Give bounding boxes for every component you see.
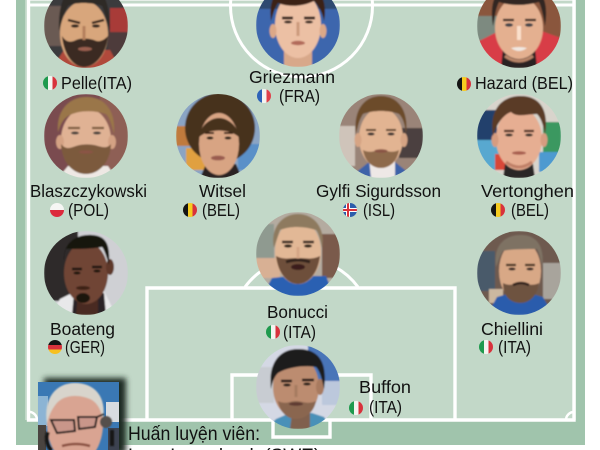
flag: Iceland — [343, 203, 357, 217]
player: Chiellini — [477, 231, 561, 357]
photo: Gylfi Sigurdsson — [339, 94, 423, 178]
photo: Witsel — [176, 93, 260, 178]
country: GER: (GER) — [65, 337, 105, 357]
player: Griezmann — [249, 0, 340, 106]
photo: Griezmann — [256, 0, 340, 67]
name: Witsel: Witsel — [199, 181, 246, 201]
country: FRA: (FRA) — [279, 86, 320, 106]
player: Blaszczykowski — [30, 94, 147, 220]
photo: Bonucci — [256, 212, 340, 296]
country: ITA: (ITA) — [498, 337, 531, 357]
flag: France — [257, 89, 272, 103]
country: ITA: (ITA) — [283, 322, 316, 342]
flag: Italy — [349, 401, 364, 415]
player: Hazard — [457, 0, 573, 93]
photo: Boateng — [44, 231, 128, 315]
photo: Blaszczykowski — [44, 94, 128, 178]
player: Bonucci — [256, 212, 340, 342]
country: ISL: (ISL) — [363, 200, 395, 220]
heading: Huấn luyện viên: Huấn luyện viên: — [128, 424, 260, 445]
flag: Poland — [50, 203, 64, 217]
photo: Buffon — [256, 345, 340, 429]
photo: Hazard — [477, 0, 561, 68]
player: Pelle — [43, 0, 132, 93]
name: Boateng: Boateng — [50, 319, 115, 339]
photo: Vertonghen — [477, 94, 561, 178]
coach label — [128, 424, 320, 450]
country: BEL: (BEL) — [511, 200, 549, 220]
country: BEL: (BEL) — [202, 200, 240, 220]
name: Pelle: Pelle(ITA) — [61, 73, 132, 93]
name: Hazard: Hazard (BEL) — [475, 73, 573, 93]
photo: Pelle — [44, 0, 128, 68]
name: Vertonghen: Vertonghen — [481, 181, 574, 201]
name: Blaszczykowski: Blaszczykowski — [30, 181, 147, 201]
country: ITA: (ITA) — [369, 397, 402, 417]
name: Buffon: Buffon — [359, 377, 411, 397]
name: Griezmann: Griezmann — [249, 67, 335, 87]
flag: Italy — [266, 325, 280, 339]
flag: Italy — [479, 340, 494, 354]
name: Chiellini: Chiellini — [481, 319, 543, 339]
coach photo — [38, 378, 126, 450]
flag: Germany — [48, 340, 62, 354]
flag: Belgium — [491, 203, 506, 217]
player: Gylfi Sigurdsson — [316, 94, 441, 220]
player: Witsel — [176, 93, 260, 220]
photo: Chiellini — [477, 231, 561, 315]
flag: Italy — [43, 76, 58, 90]
player: Buffon — [256, 345, 411, 429]
name: Gylfi Sigurdsson: Gylfi Sigurdsson — [316, 181, 441, 201]
country: POL: (POL) — [68, 200, 109, 220]
player: Boateng — [44, 231, 128, 357]
flag: Belgium — [183, 203, 198, 217]
name: Bonucci: Bonucci — [267, 302, 328, 322]
player: Vertonghen — [477, 94, 574, 220]
flag: Belgium — [457, 77, 472, 91]
